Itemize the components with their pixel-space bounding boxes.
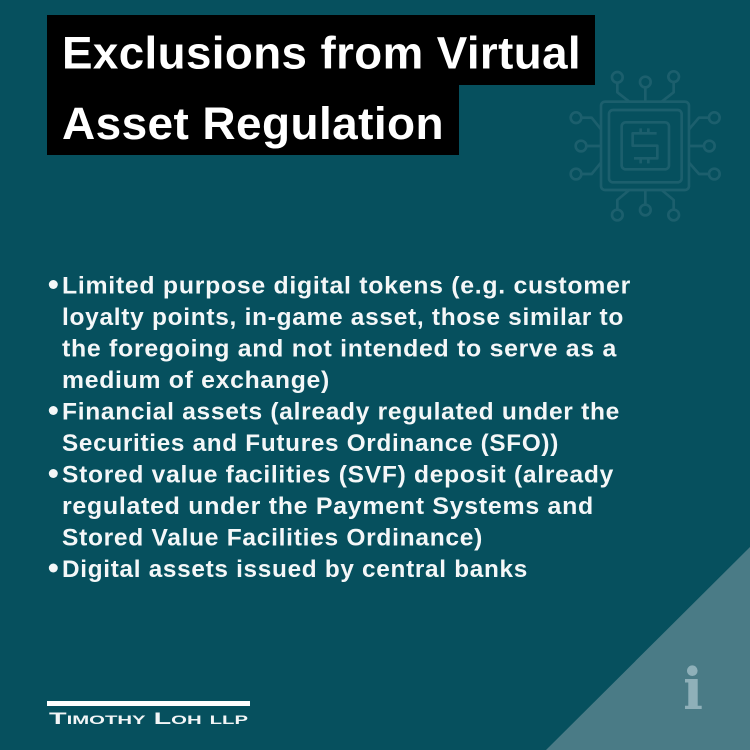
icon: information: [685, 665, 702, 709]
title: [47, 15, 595, 155]
corner triangle panel: [546, 547, 750, 750]
bullet: financial assets: [49, 398, 620, 457]
bullet: stored value facilities: Stored value facilities (SVF) deposit (already: [62, 462, 614, 488]
bullet: limited purpose digital tokens: the foregoing and not intended to serve as a: [62, 336, 617, 362]
bullet: central bank digital assets: Digital assets issued by central banks: [62, 556, 528, 583]
bullet: financial assets: Financial assets (already regulated under the: [62, 398, 620, 426]
title: Exclusions from Virtual: [62, 28, 581, 78]
bullet: financial assets: Securities and Futures Ordinance (SFO)): [62, 430, 559, 457]
title: Asset Regulation: [62, 98, 444, 149]
bullet: stored value facilities: Stored Value Facilities Ordinance): [62, 524, 483, 552]
bullet: limited purpose digital tokens: Limited purpose digital tokens (e.g. customer: [62, 272, 631, 300]
bullet: stored value facilities: [49, 462, 614, 552]
bullet: stored value facilities: regulated under the Payment Systems and: [62, 493, 594, 520]
bullet: limited purpose digital tokens: loyalty points, in-game asset, those similar to: [62, 304, 624, 331]
icon: circuit chip with dollar sign: [571, 71, 720, 220]
bullet: limited purpose digital tokens: [49, 272, 631, 394]
logo: Timothy Loh LLP: [47, 701, 250, 728]
bullet list: exclusions: [49, 272, 631, 583]
logo: Timothy Loh LLP: Timothy Loh llp: [49, 709, 248, 728]
bullet: limited purpose digital tokens: medium of exchange): [62, 367, 330, 394]
